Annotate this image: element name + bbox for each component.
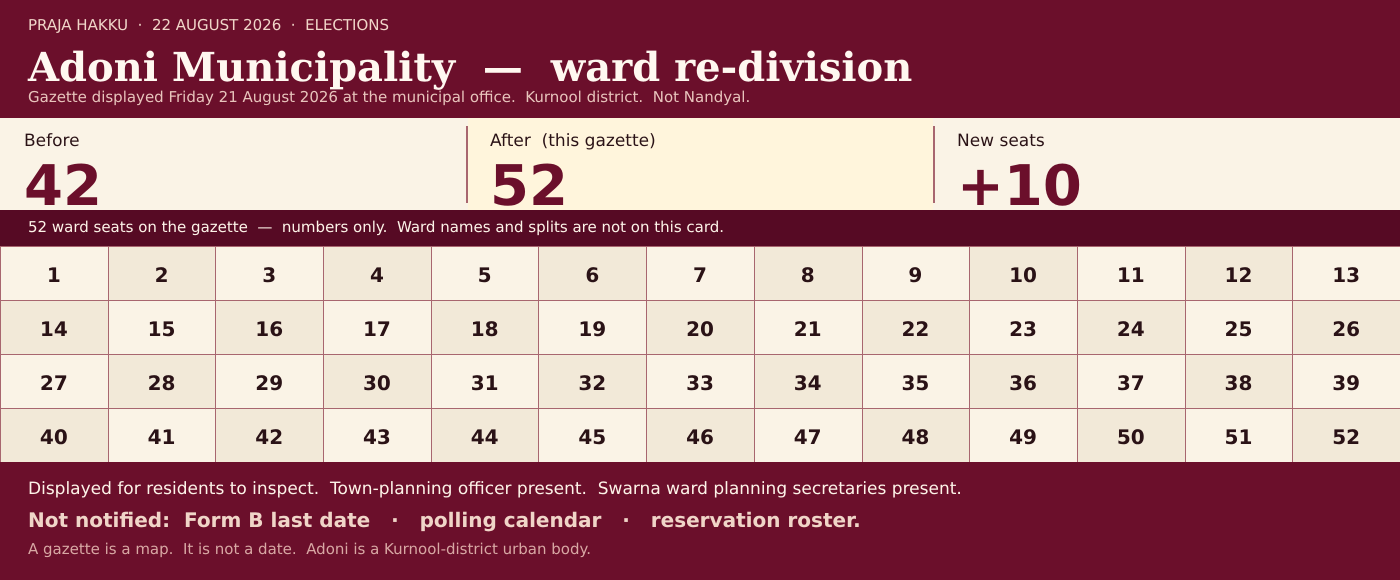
- ward number grid: 2: [155, 263, 168, 287]
- ward number grid: 26: [1332, 317, 1360, 341]
- ward number grid: 27: [40, 371, 68, 395]
- header band: [0, 0, 1400, 118]
- ward number grid: 33: [686, 371, 714, 395]
- ward number grid: 19: [578, 317, 606, 341]
- footer line: not notified: Not notified: Form B last date · polling calendar · reservation roster.: [28, 508, 861, 532]
- ward number grid: 21: [794, 317, 822, 341]
- ward number grid: 3: [262, 263, 276, 287]
- ward number grid: 43: [363, 425, 391, 449]
- ward number grid: 10: [1009, 263, 1037, 287]
- ward number grid: 35: [901, 371, 929, 395]
- ward number grid: 36: [1009, 371, 1037, 395]
- stat: before: Before: [24, 131, 80, 151]
- divider: [933, 126, 935, 203]
- title: Adoni Municipality — ward re-division: [28, 44, 912, 91]
- ward number grid: 13: [1332, 263, 1360, 287]
- ward number grid: 15: [148, 317, 175, 341]
- subtitle: Gazette displayed Friday 21 August 2026 at the municipal office. Kurnool district. Not Nandyal.: [28, 88, 750, 106]
- ward number grid: 25: [1225, 317, 1252, 341]
- ward number grid: 31: [471, 371, 499, 395]
- ward number grid: 12: [1225, 263, 1252, 287]
- eyebrow: PRAJA HAKKU · 22 AUGUST 2026 · ELECTIONS: [28, 16, 389, 34]
- ward number grid: 42: [255, 425, 283, 449]
- ward number grid: 41: [148, 425, 175, 449]
- ward number grid: 4: [370, 263, 384, 287]
- ward number grid: 32: [578, 371, 606, 395]
- ward number grid: 1: [47, 263, 61, 287]
- caption text: 52 ward seats on the gazette — numbers only. Ward names and splits are not on this card.: [28, 218, 724, 236]
- ward number grid: 7: [693, 263, 707, 287]
- stat: new seats: New seats: [957, 131, 1045, 151]
- ward number grid: 45: [578, 425, 606, 449]
- ward number grid: 39: [1332, 371, 1360, 395]
- ward number grid: 30: [363, 371, 391, 395]
- stats strip: [0, 118, 1400, 210]
- ward number grid: 52: [1332, 425, 1360, 449]
- divider: [466, 126, 468, 203]
- ward number grid: 17: [363, 317, 391, 341]
- ward number grid: 48: [901, 425, 929, 449]
- ward number grid: 46: [686, 425, 714, 449]
- ward number grid: 23: [1009, 317, 1037, 341]
- after highlight: [468, 118, 933, 210]
- ward number grid: 50: [1117, 425, 1145, 449]
- footer line: note: A gazette is a map. It is not a date. Adoni is a Kurnool-district urban body.: [28, 540, 591, 558]
- ward number grid: 20: [686, 317, 714, 341]
- ward number grid: 11: [1117, 263, 1145, 287]
- ward number grid: 44: [471, 425, 499, 449]
- ward number grid: 40: [40, 425, 68, 449]
- ward number grid: 28: [148, 371, 175, 395]
- ward number grid: 24: [1117, 317, 1145, 341]
- ward number grid: 49: [1009, 425, 1037, 449]
- ward number grid: 8: [801, 263, 815, 287]
- ward number grid: 37: [1117, 371, 1145, 395]
- ward number grid: 9: [908, 263, 922, 287]
- ward number grid: 34: [794, 371, 822, 395]
- ward number grid: 38: [1225, 371, 1252, 395]
- ward number grid: 29: [255, 371, 283, 395]
- ward number grid: 18: [471, 317, 499, 341]
- ward number grid: [0, 246, 1400, 462]
- footer line: displayed: Displayed for residents to inspect. Town-planning officer present. Swarna ward planning secretaries present.: [28, 479, 962, 499]
- ward number grid: 5: [478, 263, 492, 287]
- stat: after: [490, 131, 656, 210]
- footer band: [0, 462, 1400, 580]
- ward number grid: 22: [901, 317, 929, 341]
- caption band: [0, 210, 1400, 246]
- stat: after: After (this gazette): [490, 131, 656, 151]
- ward number grid: 16: [255, 317, 283, 341]
- ward number grid: 47: [794, 425, 822, 449]
- ward number grid: 6: [585, 263, 599, 287]
- ward number grid: 51: [1225, 425, 1252, 449]
- ward number grid: 14: [40, 317, 68, 341]
